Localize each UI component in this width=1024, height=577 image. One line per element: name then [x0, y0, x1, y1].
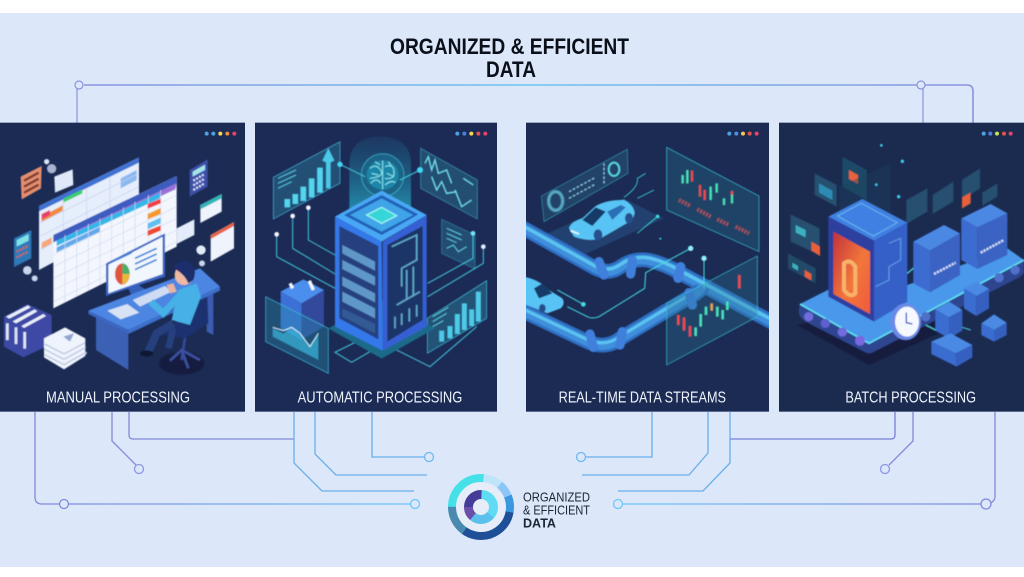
icon: clock	[890, 303, 921, 340]
conveyor shadow	[798, 322, 938, 365]
oven machine	[828, 199, 907, 322]
icon: floating note	[54, 169, 73, 193]
top connector network	[75, 81, 973, 123]
bottom-right connector network	[576, 412, 995, 509]
logo text	[523, 490, 590, 530]
circuit wires	[277, 164, 483, 367]
chart panel: top left	[273, 142, 340, 219]
small server block	[281, 279, 324, 340]
title: DATA	[486, 57, 536, 82]
desk	[88, 268, 220, 370]
illustration: desk with spreadsheets	[4, 157, 234, 375]
panel background	[526, 123, 769, 412]
paper stack	[44, 327, 87, 369]
icon: abacus	[21, 166, 42, 199]
chart panel: bottom right	[427, 281, 487, 353]
label: automatic processing: AUTOMATIC PROCESSING	[298, 390, 462, 407]
window dots	[205, 132, 236, 136]
holo panel: top right	[421, 148, 477, 219]
data link	[906, 267, 914, 274]
binders	[4, 304, 52, 357]
front spreadsheet	[53, 176, 177, 308]
panel background	[779, 123, 1024, 412]
data traces	[624, 173, 657, 233]
logo text: & EFFICIENT	[523, 504, 590, 518]
person	[140, 261, 208, 375]
server base	[328, 300, 435, 359]
logo mark	[440, 466, 522, 548]
back spreadsheet	[39, 157, 139, 270]
title: ORGANIZED & EFFICIENT	[390, 34, 629, 59]
holo panel: right middle	[442, 219, 475, 269]
panel: batch processing	[779, 123, 1024, 412]
label: batch processing: BATCH PROCESSING	[845, 390, 976, 407]
small cubes	[926, 282, 1007, 367]
candlestick panel: top right	[667, 147, 759, 252]
logo text: ORGANIZED	[523, 490, 590, 504]
icon: side documents	[177, 194, 234, 262]
illustration: server hub	[266, 137, 487, 373]
window dots	[982, 132, 1013, 136]
window dots	[727, 132, 759, 136]
candlestick panel: bottom right	[667, 256, 757, 365]
car floor glow	[544, 198, 664, 255]
car 2	[522, 277, 564, 313]
stream traces and nodes	[557, 215, 707, 318]
wire nodes	[274, 162, 486, 249]
brain hologram	[349, 137, 411, 210]
pipeline upper	[521, 225, 777, 325]
pipeline lower	[521, 287, 702, 345]
panel: automatic processing	[255, 123, 497, 412]
floating data cards	[788, 144, 997, 283]
chart panel: bottom left	[266, 297, 328, 373]
car dashboard panel	[541, 149, 628, 222]
conveyor belt	[799, 248, 1024, 353]
icon: floating dots	[23, 159, 206, 281]
label: manual processing: MANUAL PROCESSING	[46, 390, 190, 407]
panel background	[255, 123, 497, 412]
logo text: DATA	[523, 516, 556, 530]
icon: calculators	[14, 159, 208, 267]
illustration: data pipelines	[521, 147, 777, 365]
panel background	[0, 123, 245, 412]
label: real-time data streams: REAL-TIME DATA STREAMS	[559, 390, 726, 407]
monitor	[106, 233, 165, 296]
illustration: conveyor batch	[788, 144, 1024, 367]
title	[390, 34, 629, 82]
large box: front	[913, 225, 960, 292]
large box: rear	[961, 204, 1007, 269]
pipe flanges	[590, 260, 692, 347]
panel: real-time data streams	[521, 123, 777, 412]
car 1	[569, 200, 635, 241]
bottom-left connector network	[35, 412, 434, 508]
panel: manual processing	[0, 123, 245, 412]
window dots	[455, 132, 487, 136]
server tower	[335, 191, 427, 351]
